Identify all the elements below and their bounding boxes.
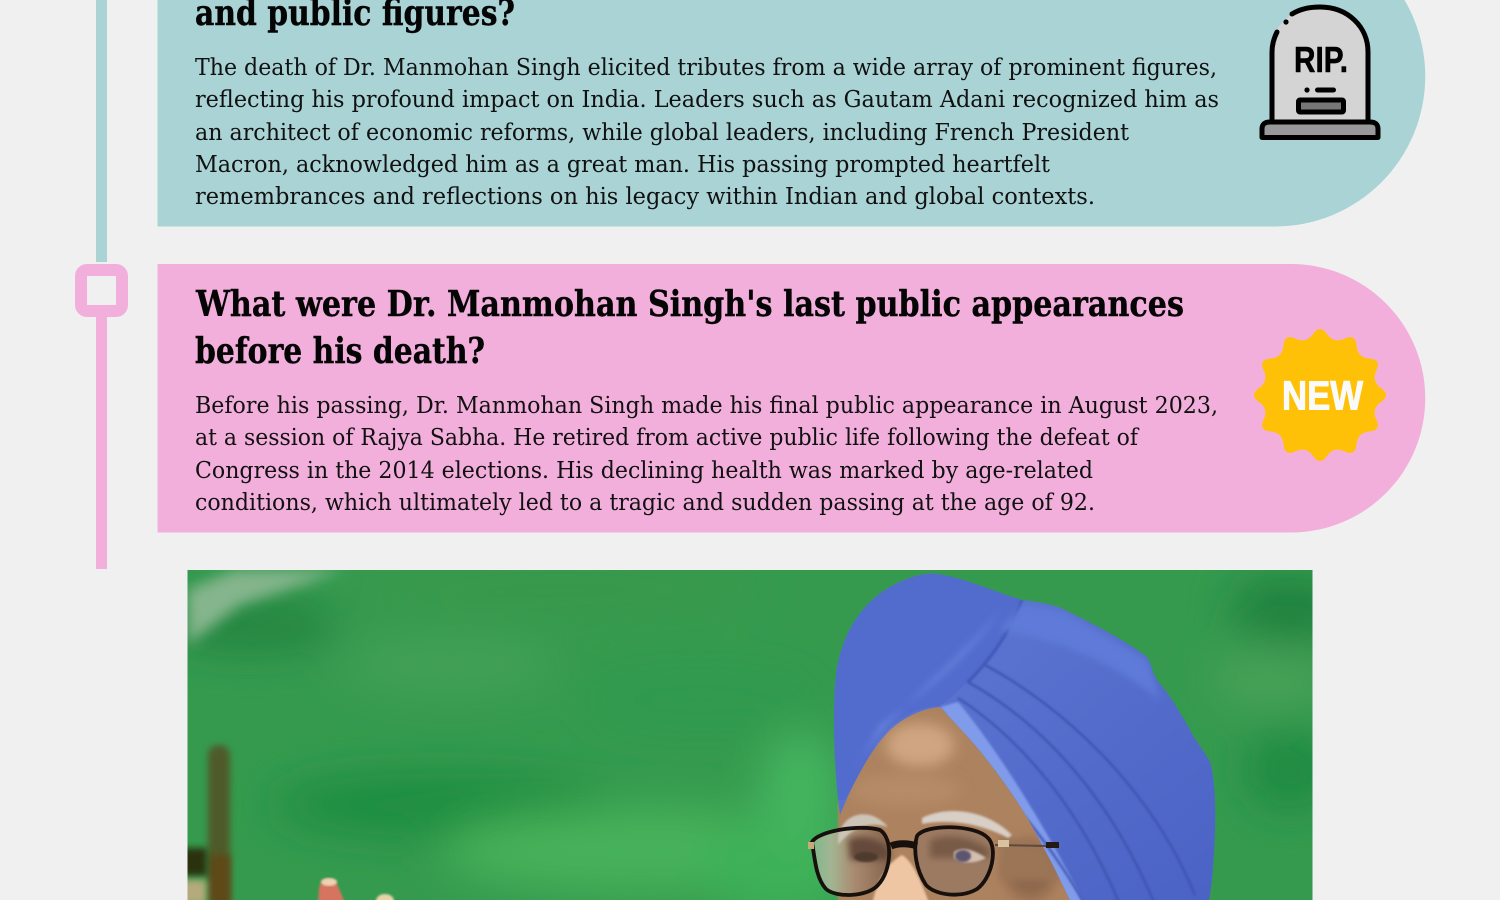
heading: last public appearances: before his death? bbox=[195, 331, 485, 372]
icon: RIP tombstone bbox=[1262, 7, 1378, 138]
timeline: teal segment bbox=[96, 0, 107, 262]
text block: tributes: an architect of economic reforms, while global leaders, including French President bbox=[195, 120, 1130, 146]
sub-photo: face bbox=[838, 698, 1078, 900]
timeline: pink segment bbox=[96, 316, 107, 569]
text block: tributes: The death of Dr. Manmohan Singh elicited tributes from a wide array of prominent figures, bbox=[195, 55, 1217, 81]
heading: last public appearances: What were Dr. Manmohan Singh's last public appearances bbox=[195, 284, 1184, 325]
text block: last public appearances: conditions, which ultimately led to a tragic and sudden passing at the age of 92. bbox=[195, 490, 1095, 516]
icon: RIP tombstone: RIP. bbox=[1294, 39, 1348, 80]
text block: last public appearances: at a session of Rajya Sabha. He retired from active public life following the defeat of bbox=[195, 425, 1139, 451]
panel background: pink bbox=[158, 264, 1425, 532]
text block: tributes: remembrances and reflections on his legacy within Indian and global contexts. bbox=[195, 184, 1095, 210]
timeline marker: pink square bbox=[81, 270, 122, 311]
icon: NEW badge bbox=[1254, 329, 1386, 461]
sub-photo: turban bbox=[825, 565, 1225, 900]
text block: last public appearances: Congress in the 2014 elections. His declining health was marked by age-related bbox=[195, 458, 1093, 484]
text block: last public appearances: Before his passing, Dr. Manmohan Singh made his final public appearance in August 2023, bbox=[195, 393, 1218, 419]
heading: last public appearances bbox=[195, 284, 1184, 372]
panel background: teal bbox=[158, 0, 1425, 226]
panel: tributes bbox=[158, 0, 1425, 226]
photo: Dr. Manmohan Singh against green backdrop bbox=[160, 565, 1350, 900]
text block: tributes bbox=[195, 55, 1219, 210]
panel: last public appearances bbox=[158, 264, 1425, 532]
text block: tributes: reflecting his profound impact on India. Leaders such as Gautam Adani recognized him as bbox=[195, 87, 1219, 113]
sub-photo: glasses and eyes bbox=[808, 811, 1059, 900]
text block: last public appearances bbox=[195, 393, 1218, 516]
icon: NEW badge: NEW bbox=[1282, 372, 1363, 418]
text block: tributes: Macron, acknowledged him as a great man. His passing prompted heartfelt bbox=[195, 152, 1051, 178]
